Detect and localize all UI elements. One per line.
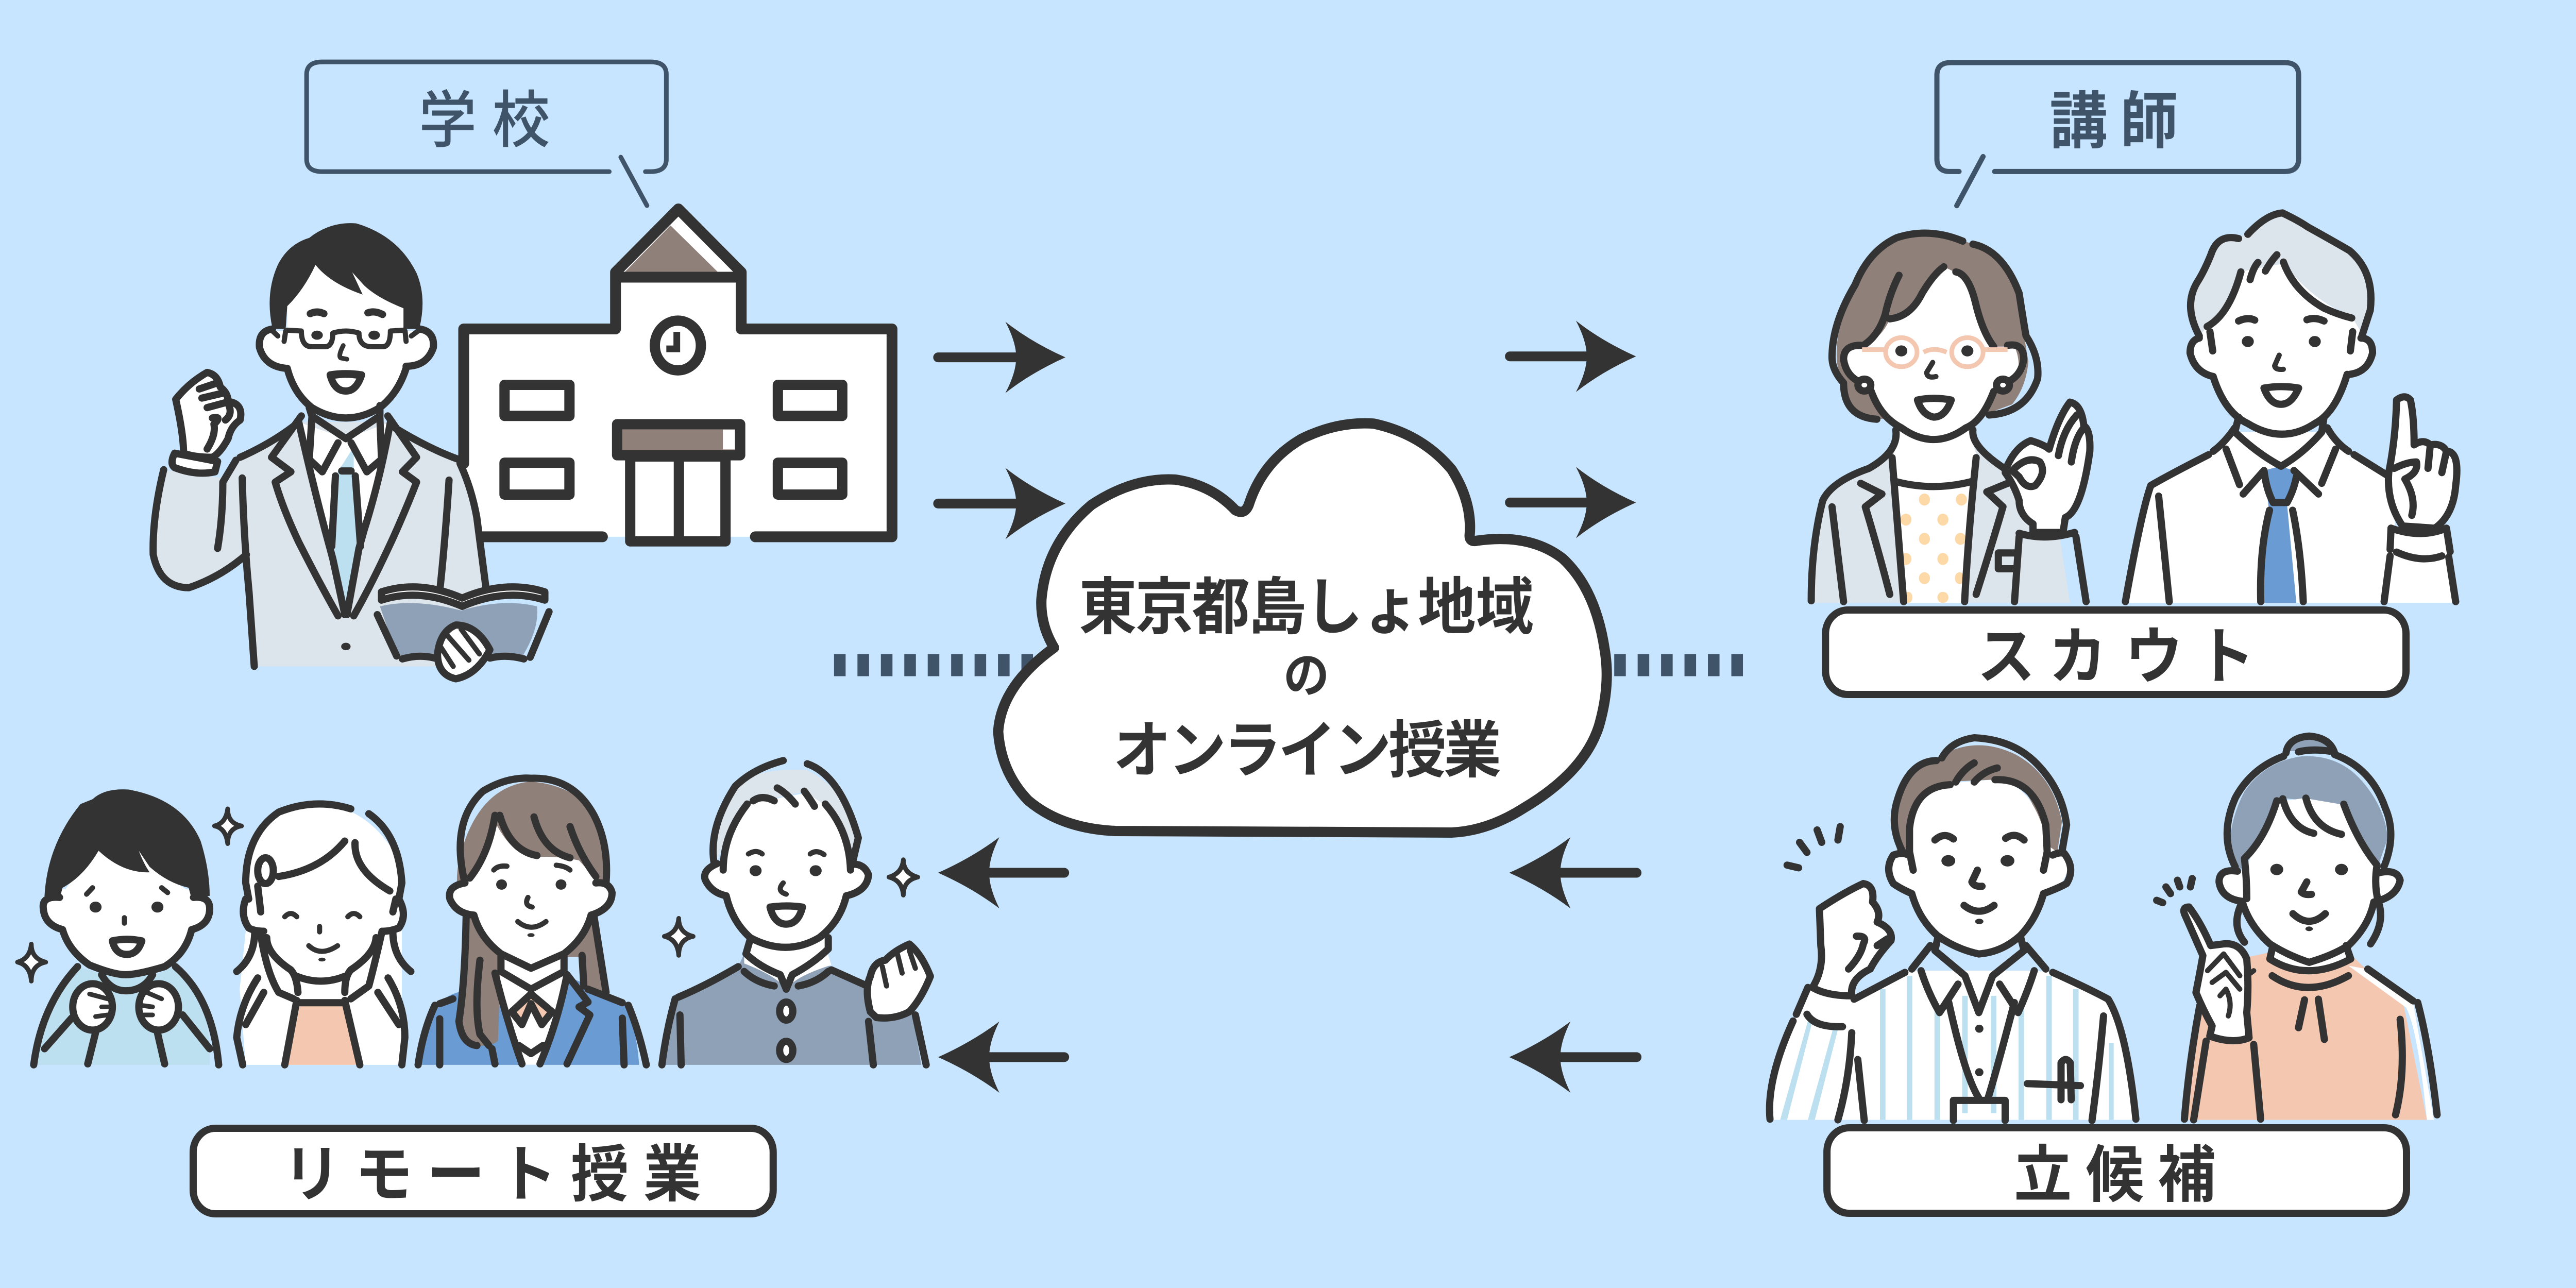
woman with peach top bbox=[2157, 736, 2437, 1120]
central cloud bbox=[998, 423, 1607, 833]
pointing hand bbox=[2388, 397, 2457, 528]
cloud title text: 東京都島しょ地域 bbox=[1079, 573, 1534, 642]
boy in school uniform bbox=[662, 760, 930, 1065]
heading: instructors: 講師 bbox=[2049, 87, 2178, 156]
label: candidates bbox=[1827, 1128, 2406, 1213]
cloud title text: の bbox=[1283, 648, 1329, 703]
label: scout bbox=[1825, 610, 2406, 694]
cloud title text bbox=[1079, 573, 1534, 785]
girl with hands on cheeks bbox=[236, 803, 411, 1065]
label: remote classes bbox=[193, 1128, 773, 1214]
dotted connector left bbox=[834, 654, 1043, 676]
teacher with book bbox=[153, 223, 549, 679]
cloud title text: オンライン授業 bbox=[1113, 716, 1501, 785]
arrows bbox=[938, 321, 1637, 1093]
fist bbox=[1812, 884, 1891, 996]
man instructor pointing bbox=[2125, 213, 2457, 603]
girl in blue blazer bbox=[418, 778, 646, 1065]
label: remote classes: リモート授業 bbox=[283, 1140, 701, 1209]
windows bbox=[504, 385, 842, 495]
candidates bbox=[1770, 736, 2437, 1121]
school building bbox=[464, 209, 892, 541]
dotted connector right bbox=[1614, 654, 1743, 676]
woman instructor with glasses bbox=[1811, 233, 2090, 603]
boy bbox=[33, 789, 218, 1065]
students group bbox=[33, 760, 930, 1065]
sparkles bbox=[18, 809, 918, 981]
label: candidates: 立候補 bbox=[2014, 1141, 2216, 1210]
instructor speech bubble bbox=[1937, 62, 2299, 206]
man in striped shirt bbox=[1770, 738, 2136, 1121]
heading: school: 学校 bbox=[419, 86, 550, 155]
label: scout: スカウト bbox=[1977, 622, 2255, 691]
clock bbox=[655, 320, 701, 370]
school speech bubble bbox=[307, 62, 666, 206]
open book bbox=[377, 587, 549, 679]
OK hand bbox=[2005, 402, 2090, 532]
hand bbox=[867, 944, 930, 1018]
entrance bbox=[617, 424, 740, 541]
